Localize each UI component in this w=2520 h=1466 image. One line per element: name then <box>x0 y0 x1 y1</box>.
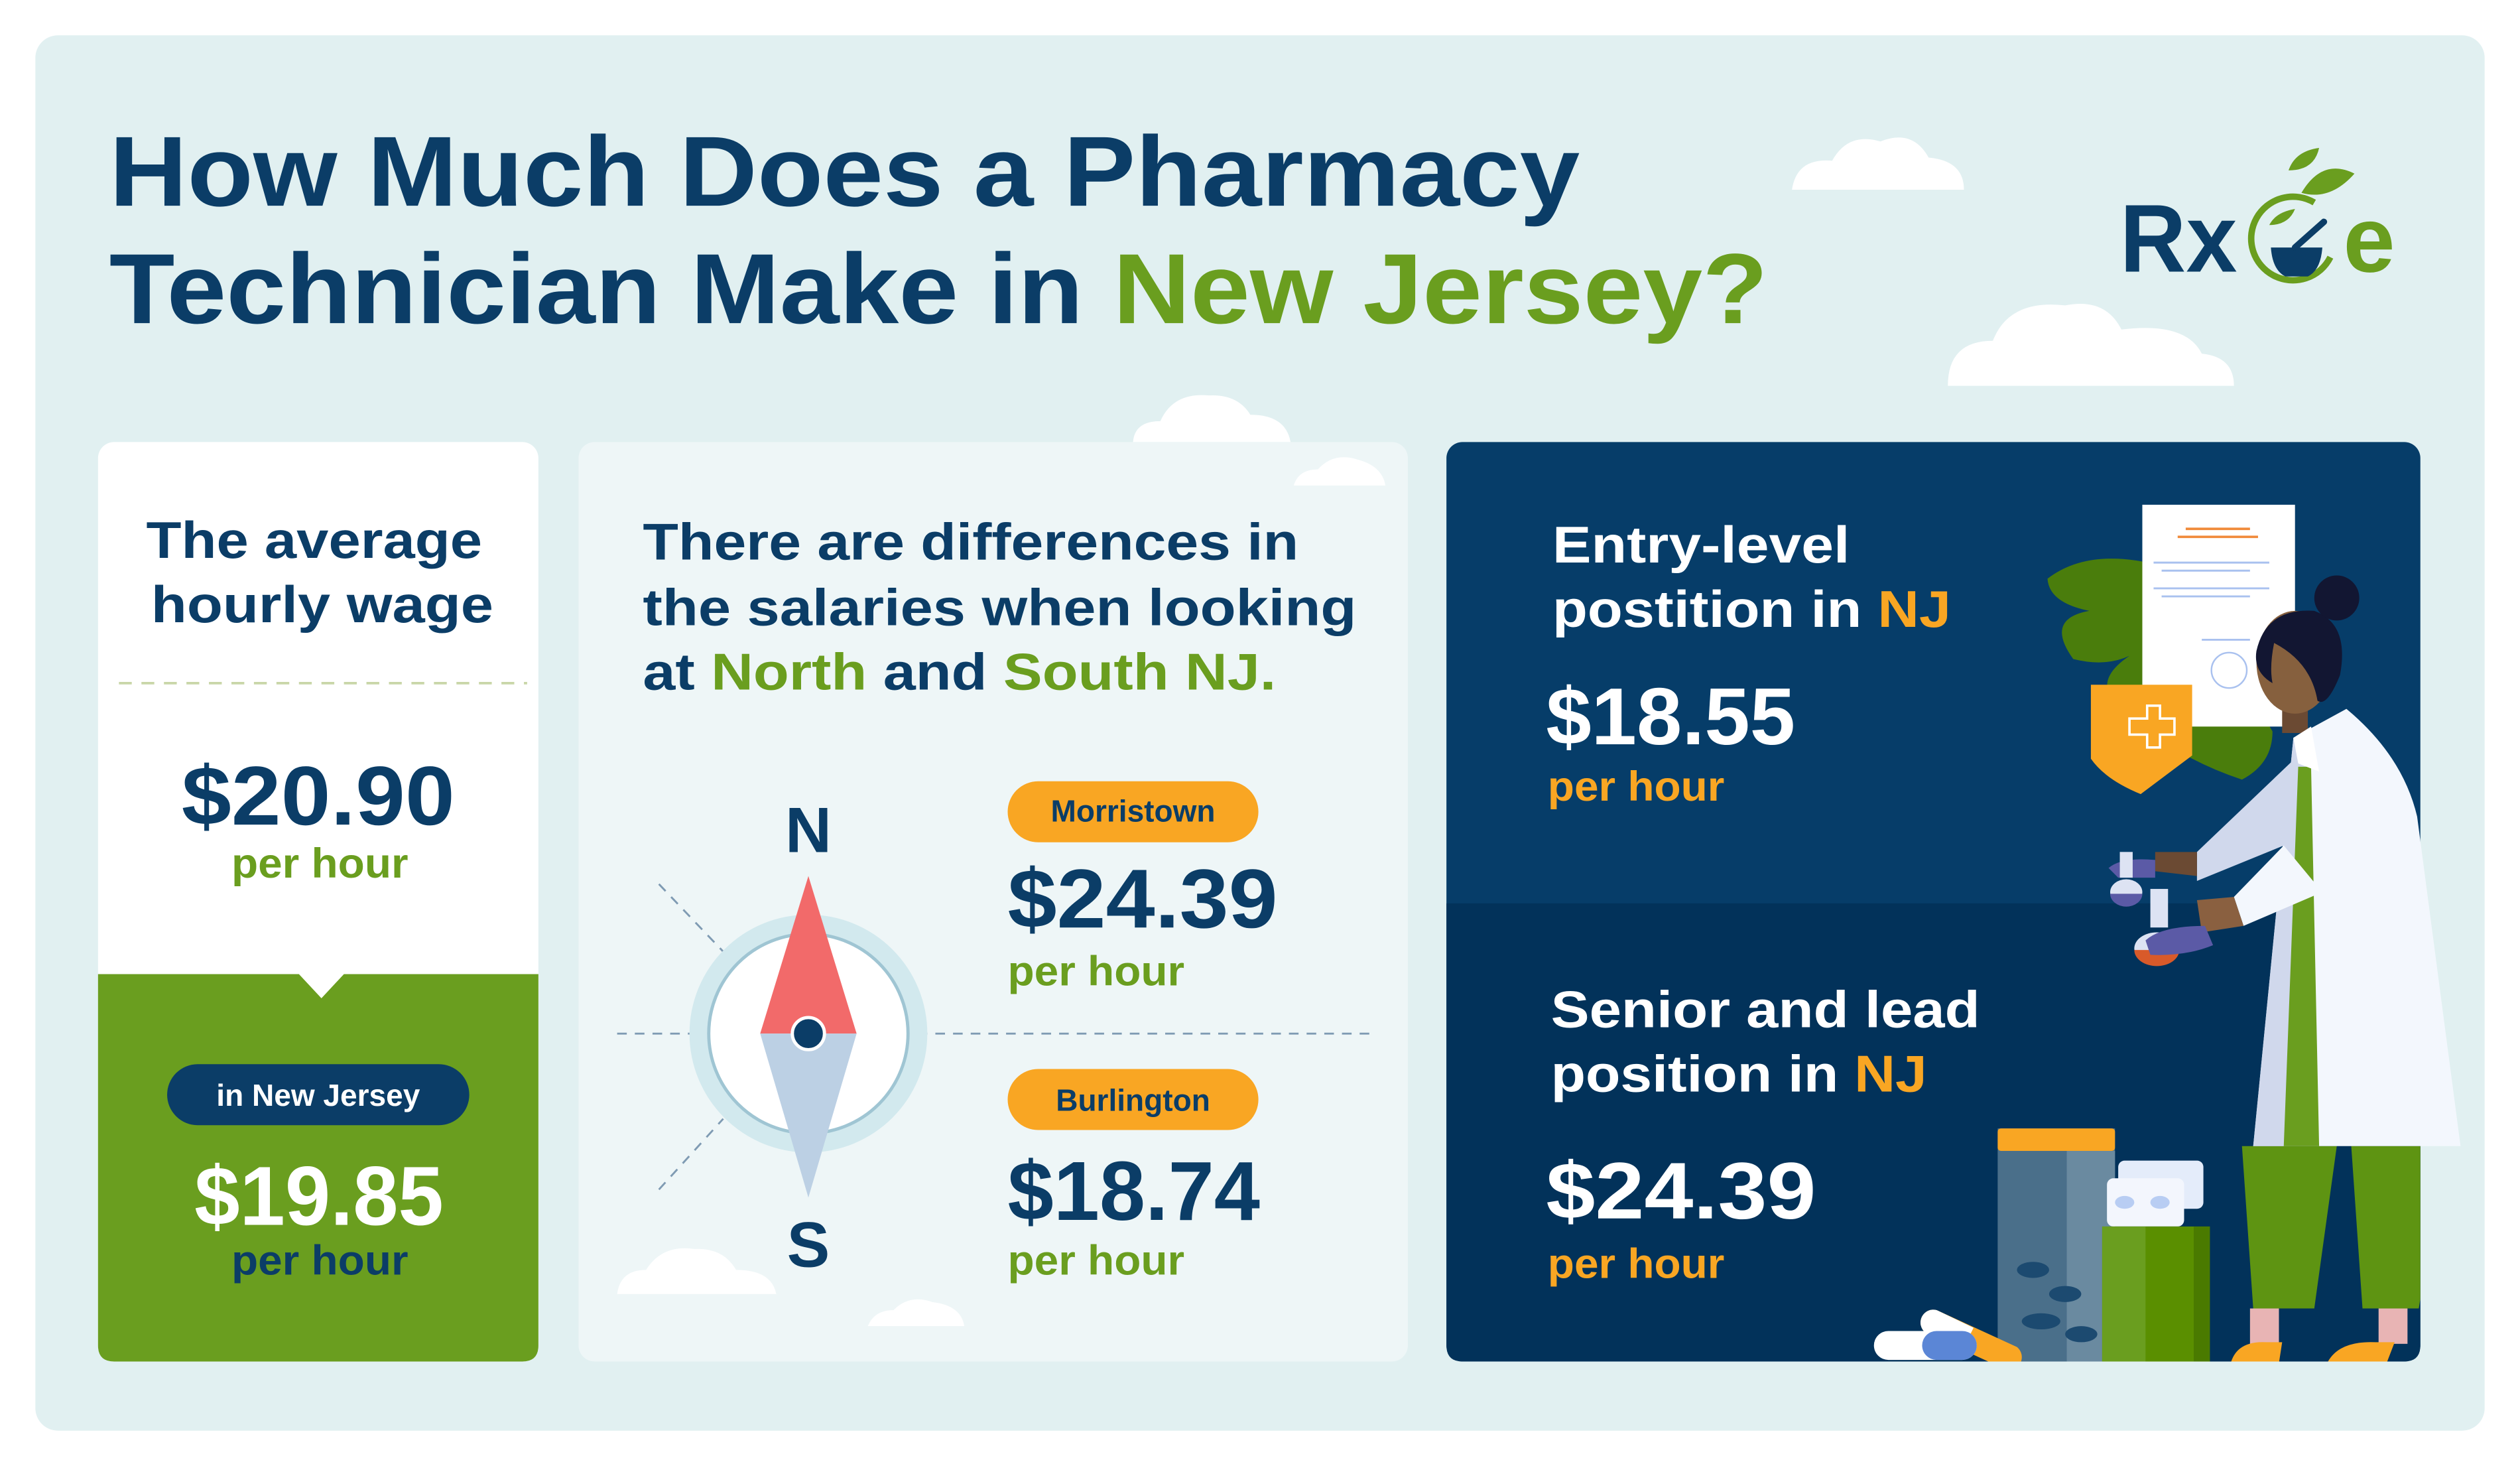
heading: differences: There are differences in <box>643 513 1298 570</box>
compass: N <box>785 793 832 866</box>
pill: in New Jersey: in New Jersey <box>216 1078 420 1112</box>
text: entry-level: $18.55 <box>1546 671 1795 762</box>
heading: average hourly wage: hourly wage <box>151 576 493 633</box>
text: senior: Senior and lead <box>1551 981 1980 1038</box>
text: entry-level: postition in NJ <box>1552 581 1951 638</box>
text: senior: $24.39 <box>1546 1146 1816 1236</box>
panel: north vs south <box>578 442 1408 1361</box>
title <box>109 115 1768 344</box>
logo <box>2120 148 2395 293</box>
value: $19.85: $19.85 <box>194 1150 444 1243</box>
value: $18.74 Burlington <box>1008 1144 1260 1284</box>
shield <box>2091 685 2192 794</box>
value: $18.74 Burlington: $18.74 <box>1008 1144 1260 1238</box>
panel: entry vs senior <box>1446 442 2421 1361</box>
heading: average hourly wage: The average <box>147 512 482 569</box>
value: $19.85 <box>194 1150 444 1284</box>
capsules <box>1921 1309 2022 1361</box>
text: entry-level: Entry-level <box>1552 517 1850 574</box>
illustration: pharmacist <box>1874 505 2460 1371</box>
jar <box>1997 1128 2115 1370</box>
pill: Morristown: Morristown <box>1051 793 1216 828</box>
pharmacist legs <box>2242 1146 2337 1309</box>
text: entry-level: per hour <box>1548 764 1724 810</box>
leaf <box>2048 559 2273 779</box>
value: $24.39 Morristown: per hour <box>1008 948 1184 994</box>
text: senior <box>1546 981 1980 1287</box>
logo: Rx <box>2120 184 2237 293</box>
title: How Much Does a Pharmacy <box>109 115 1580 227</box>
compass: S <box>787 1209 830 1281</box>
pill: in New Jersey <box>167 1064 470 1125</box>
document <box>2142 505 2295 726</box>
blister and box <box>2118 1161 2204 1209</box>
pill: Morristown <box>1008 781 1259 842</box>
value: $18.74 Burlington: per hour <box>1008 1238 1184 1284</box>
value: $24.39 Morristown: $24.39 <box>1008 852 1278 945</box>
text: senior: position in NJ <box>1551 1045 1927 1102</box>
title: Technician Make in New Jersey? <box>109 233 1768 344</box>
text: entry-level <box>1546 517 1951 810</box>
heading: average hourly wage <box>147 512 493 633</box>
panel: average hourly wage <box>98 442 538 1361</box>
compass <box>617 793 1374 1281</box>
heading: differences <box>643 513 1356 701</box>
logo: e <box>2343 188 2395 292</box>
value: $20.90: per hour <box>231 840 409 887</box>
value: $24.39 Morristown <box>1008 852 1278 994</box>
heading: differences: the salaries when looking <box>643 580 1356 637</box>
value: $20.90 <box>182 749 455 887</box>
heading: differences: at North and South NJ. <box>643 644 1276 701</box>
clouds <box>1133 137 2234 442</box>
text: senior: per hour <box>1548 1240 1724 1287</box>
value: $19.85: per hour <box>231 1238 409 1284</box>
clouds in panel <box>617 457 1385 1326</box>
value: $20.90: $20.90 <box>182 749 455 842</box>
pill: Burlington: Burlington <box>1056 1083 1210 1117</box>
pill: Burlington <box>1008 1069 1259 1130</box>
